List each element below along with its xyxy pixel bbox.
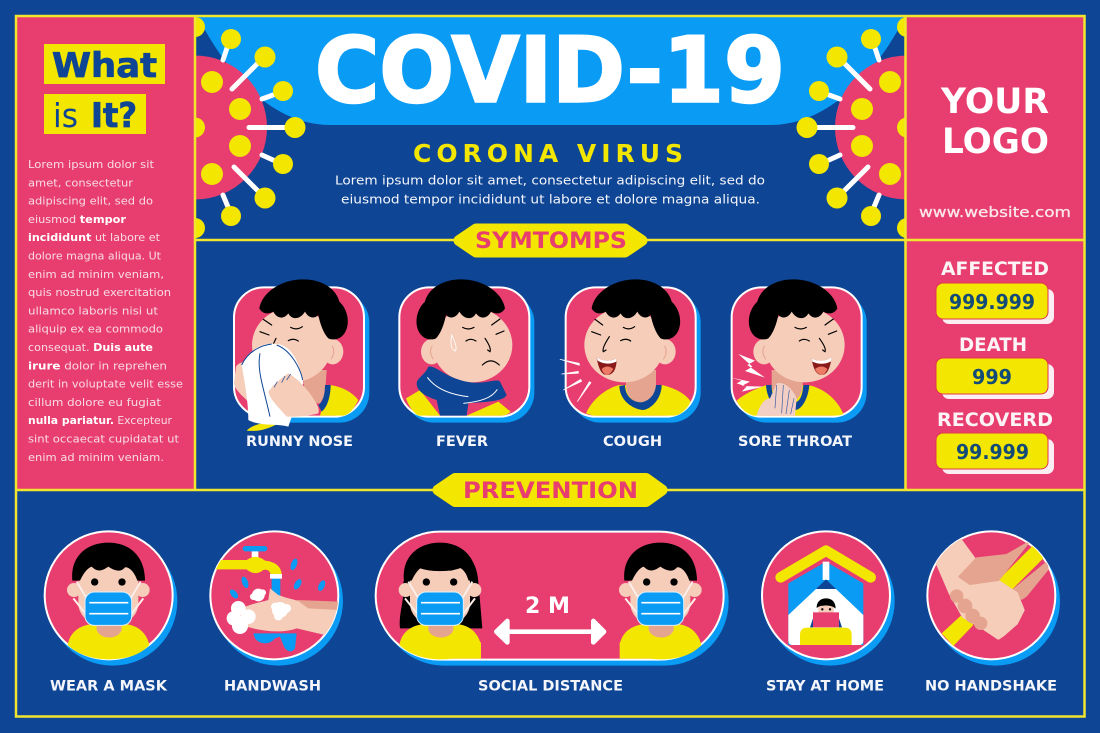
label: SOCIAL DISTANCE (478, 678, 623, 694)
panel: what is it background (16, 16, 195, 489)
body text (28, 158, 183, 464)
label: NO HANDSHAKE (925, 678, 1057, 694)
prevention: social distance (376, 532, 729, 694)
panel: logo background (906, 16, 1084, 240)
logo block: LOGO (942, 122, 1049, 162)
body text: ullamco laboris nisi ut (28, 304, 158, 317)
header description (335, 172, 765, 206)
symptom: fever (399, 279, 534, 450)
body text: nulla pariatur. Excepteur (28, 414, 173, 427)
body text: enim ad minim veniam. (28, 451, 164, 464)
logo block (919, 82, 1071, 221)
icon: virus right (796, 17, 979, 238)
double arrow (496, 621, 604, 642)
prevention: no handshake (925, 531, 1060, 694)
distance label: 2 M (525, 594, 570, 619)
prevention: wear a mask (45, 531, 177, 694)
body text: incididunt ut labore et (28, 231, 160, 244)
body text: enim ad minim veniam, (28, 268, 164, 281)
label: FEVER (436, 434, 488, 450)
symptom: cough (560, 279, 701, 450)
stat: recoverd: 99.999 (956, 440, 1029, 464)
label: RUNNY NOSE (246, 434, 353, 450)
panel: stats background (906, 241, 1084, 489)
header description: Lorem ipsum dolor sit amet, consectetur adipiscing elit, sed do (335, 172, 765, 188)
boy with mask (619, 543, 702, 659)
body text: Lorem ipsum dolor sit (28, 158, 154, 171)
header banner: light blue (198, 17, 905, 125)
heading: is it: is (53, 96, 78, 135)
title: COVID-19 (315, 18, 785, 124)
logo block: YOUR (940, 82, 1049, 122)
ribbon: prevention: PREVENTION (463, 479, 638, 504)
stat: recoverd: RECOVERD (937, 410, 1053, 431)
ribbon: prevention (438, 478, 662, 504)
stat: death: 999 (972, 365, 1012, 389)
logo block: www.website.com (919, 205, 1071, 221)
label: HANDWASH (224, 678, 321, 694)
stat: death (936, 335, 1054, 399)
body text: quis nostrud exercitation (28, 286, 171, 299)
header description: eiusmod tempor incididunt ut labore et dolore magna aliqua. (341, 192, 760, 206)
stat: affected (936, 259, 1054, 324)
body text: aliquip ex ea commodo (28, 323, 163, 336)
heading: is it (44, 94, 146, 136)
stat: affected: AFFECTED (941, 259, 1049, 280)
body text: adipiscing elit, sed do (28, 195, 153, 208)
body text: eiusmod tempor (28, 213, 127, 226)
prevention: stay at home (762, 531, 895, 694)
stat: death: DEATH (959, 335, 1027, 356)
stat: affected: 999.999 (949, 290, 1035, 314)
symptom: runny nose (234, 279, 369, 450)
body text: derit in voluptate velit esse (28, 378, 183, 391)
heading: is it: It? (91, 96, 137, 136)
stat: recoverd (936, 410, 1054, 474)
body text: cillum dolore eu fugiat (28, 396, 161, 409)
icon: virus left (123, 17, 306, 238)
symptom: sore throat (730, 279, 867, 450)
label: SORE THROAT (738, 434, 852, 450)
label: COUGH (603, 434, 662, 450)
body text: sint occaecat cupidatat ut (28, 432, 179, 446)
girl with mask (399, 543, 482, 659)
label: STAY AT HOME (766, 678, 884, 694)
heading: what: What (52, 46, 157, 86)
panel: what is it (28, 44, 183, 464)
body text: consequat. Duis aute (28, 341, 153, 354)
body text: amet, consectetur (28, 176, 134, 189)
ribbon: symtomps: SYMTOMPS (475, 229, 627, 254)
label: WEAR A MASK (50, 678, 168, 694)
body text: irure dolor in reprehen (28, 359, 167, 372)
subtitle: CORONA VIRUS (413, 139, 683, 168)
prevention: handwash (210, 531, 343, 694)
body text: dolore magna aliqua. Ut (28, 250, 161, 262)
